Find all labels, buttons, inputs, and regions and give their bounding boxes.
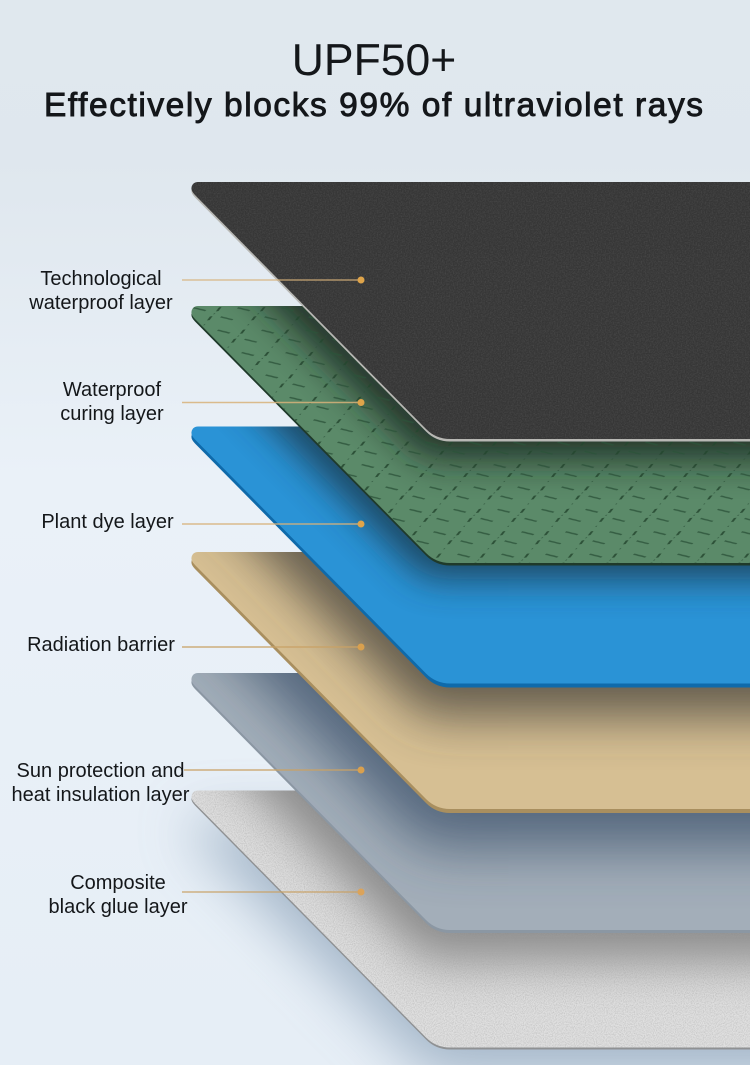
callout: composite black glue layer — [49, 872, 364, 918]
callout: composite black glue layer: Composite — [70, 872, 166, 894]
layer: sun protection and heat insulation — [191, 673, 750, 933]
callout: plant dye layer: Plant dye layer — [41, 511, 174, 533]
callout: technological waterproof layer: waterproof layer — [28, 292, 173, 314]
subtitle: Effectively blocks 99% of ultraviolet rays — [44, 87, 703, 124]
callout: waterproof curing layer: curing layer — [60, 403, 164, 425]
callout: sun protection and heat insulation layer: heat insulation layer — [12, 784, 190, 806]
callout: sun protection and heat insulation layer — [12, 760, 364, 806]
layer: composite black glue — [191, 790, 750, 1050]
callout: technological waterproof layer — [28, 268, 364, 314]
title: UPF50+ — [292, 36, 456, 85]
layer: plant dye — [191, 426, 750, 688]
callout: waterproof curing layer — [60, 379, 364, 425]
callout: sun protection and heat insulation layer: Sun protection and — [17, 760, 184, 782]
callout: radiation barrier: Radiation barrier — [27, 634, 175, 656]
layer: waterproof curing — [191, 306, 750, 566]
shadow below bottom layer — [187, 820, 750, 1065]
callout: composite black glue layer: black glue layer — [49, 896, 188, 918]
callout: waterproof curing layer: Waterproof — [63, 379, 162, 401]
layer: radiation barrier — [191, 552, 750, 813]
layer: technological waterproof — [190, 180, 750, 442]
callout: radiation barrier — [27, 634, 364, 656]
callout: plant dye layer — [41, 511, 364, 533]
callout: technological waterproof layer: Technological — [40, 268, 162, 290]
